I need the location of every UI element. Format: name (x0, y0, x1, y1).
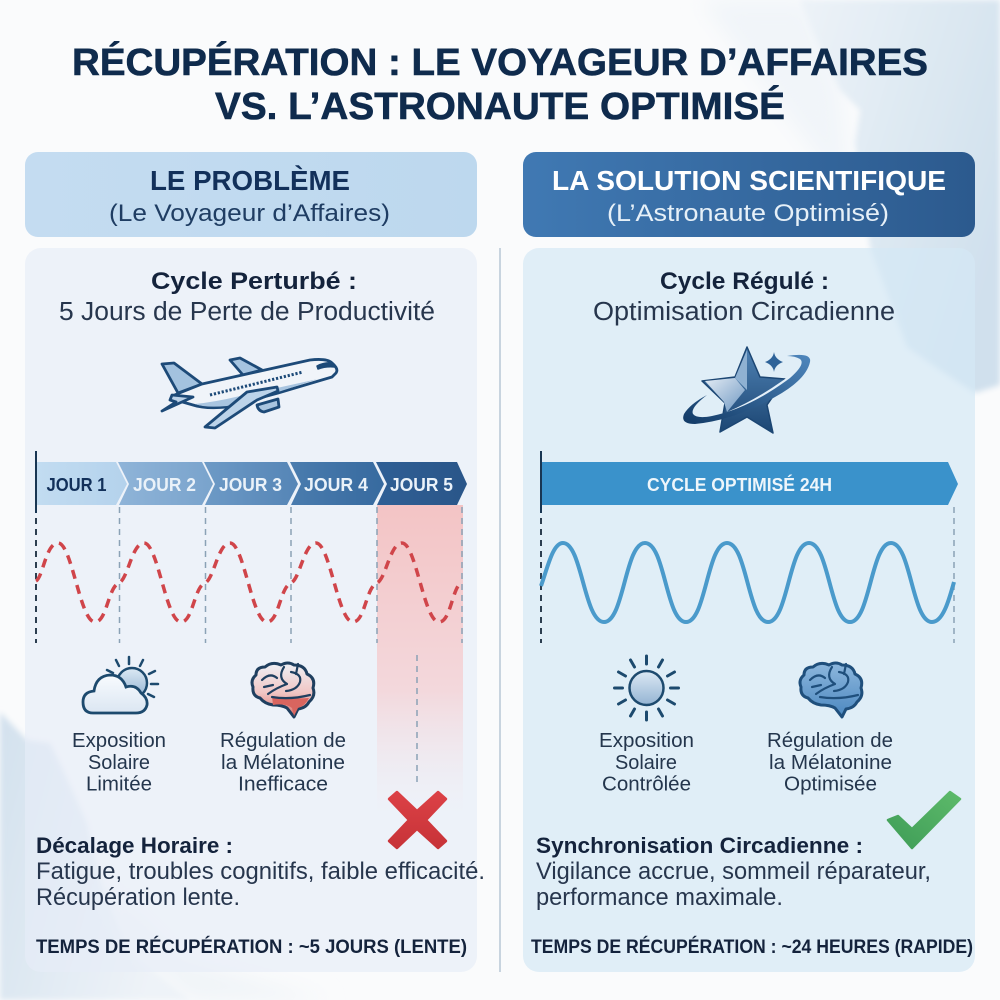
timeline: cycle optimisé 24h: CYCLE OPTIMISÉ 24H (647, 474, 832, 495)
panel heading: cycle régulé: Optimisation Circadienne (593, 298, 895, 326)
label: exposition solaire limitée: Limitée (86, 774, 152, 796)
text: décalage horaire: Décalage Horaire : (36, 833, 233, 858)
header: le problème: (Le Voyageur d’Affaires) (109, 200, 390, 227)
timeline: jours 1 to 5 (36, 451, 467, 513)
day separators (36, 507, 462, 785)
icon: sun behind cloud (83, 657, 158, 713)
label: exposition solaire contrôlée: Contrôlée (602, 774, 691, 796)
header: la solution scientifique: LA SOLUTION SCIENTIFIQUE (552, 165, 946, 196)
label: régulation de la mélatonine inefficace: la Mélatonine (221, 752, 345, 774)
text: décalage horaire (36, 833, 485, 911)
panel: la solution scientifique (523, 248, 975, 972)
header: le problème: LE PROBLÈME (150, 165, 350, 196)
label: régulation de la mélatonine inefficace (220, 730, 346, 796)
panel heading: cycle perturbé: Cycle Perturbé : (151, 268, 357, 295)
label: exposition solaire limitée: Solaire (88, 752, 150, 774)
header: la solution scientifique (523, 152, 975, 237)
label: exposition solaire contrôlée: Exposition (599, 730, 694, 752)
label: exposition solaire limitée: Exposition (72, 730, 166, 752)
header: le problème (25, 152, 477, 237)
chart: disrupted circadian wave (36, 543, 462, 622)
timeline: jours 1 to 5: JOUR 3 (219, 475, 282, 495)
label: régulation de la mélatonine optimisée: Régulation de (767, 730, 893, 752)
text: synchronisation circadienne: Synchronisation Circadienne : (536, 833, 863, 858)
timeline: jours 1 to 5: JOUR 1 (46, 475, 106, 495)
chart: regulated circadian wave (541, 543, 954, 622)
timeline: cycle optimisé 24h (541, 451, 958, 513)
text: synchronisation circadienne: Vigilance accrue, sommeil réparateur, (536, 858, 931, 885)
title: RÉCUPÉRATION : LE VOYAGEUR D’AFFAIRES (72, 40, 928, 84)
icon: inefficient brain (252, 663, 314, 717)
panel heading: cycle régulé: Cycle Régulé : (660, 268, 829, 295)
label: régulation de la mélatonine optimisée: Optimisée (784, 774, 877, 796)
icon: controlled sun (614, 656, 678, 720)
label: exposition solaire contrôlée: Solaire (615, 752, 677, 774)
panel heading: cycle perturbé (59, 268, 435, 326)
timeline: jours 1 to 5: JOUR 5 (390, 475, 453, 495)
title (72, 40, 928, 128)
text: synchronisation circadienne (536, 833, 931, 911)
timeline: jours 1 to 5: JOUR 4 (304, 475, 368, 495)
label: régulation de la mélatonine optimisée: la Mélatonine (769, 752, 892, 774)
label: exposition solaire limitée (72, 730, 166, 796)
label: régulation de la mélatonine optimisée (767, 730, 893, 796)
label: régulation de la mélatonine inefficace: Régulation de (220, 730, 346, 752)
icon: green check (888, 792, 960, 848)
cycle boundaries (541, 507, 954, 643)
icon: star with orbit (683, 347, 810, 433)
panel: le problème (25, 248, 485, 972)
label: exposition solaire contrôlée (599, 730, 694, 796)
text: décalage horaire: Récupération lente. (36, 884, 240, 911)
title: VS. L’ASTRONAUTE OPTIMISÉ (215, 84, 785, 128)
icon: red cross (389, 792, 446, 848)
center divider (499, 248, 501, 972)
header: la solution scientifique: (L’Astronaute Optimisé) (607, 200, 889, 227)
panel heading: cycle régulé (593, 268, 895, 326)
highlight band: jour 5 (377, 505, 463, 815)
panel heading: cycle perturbé: 5 Jours de Perte de Productivité (59, 298, 435, 326)
label: régulation de la mélatonine inefficace: Inefficace (238, 774, 328, 796)
timeline: jours 1 to 5: JOUR 2 (133, 475, 196, 495)
icon: airplane (162, 358, 337, 428)
text: synchronisation circadienne: performance maximale. (536, 884, 783, 911)
icon: optimised brain (800, 663, 862, 717)
text: décalage horaire: Fatigue, troubles cognitifs, faible efficacité. (36, 858, 485, 885)
text: temps de récupération lente: TEMPS DE RÉCUPÉRATION : ~5 JOURS (LENTE) (36, 935, 467, 958)
